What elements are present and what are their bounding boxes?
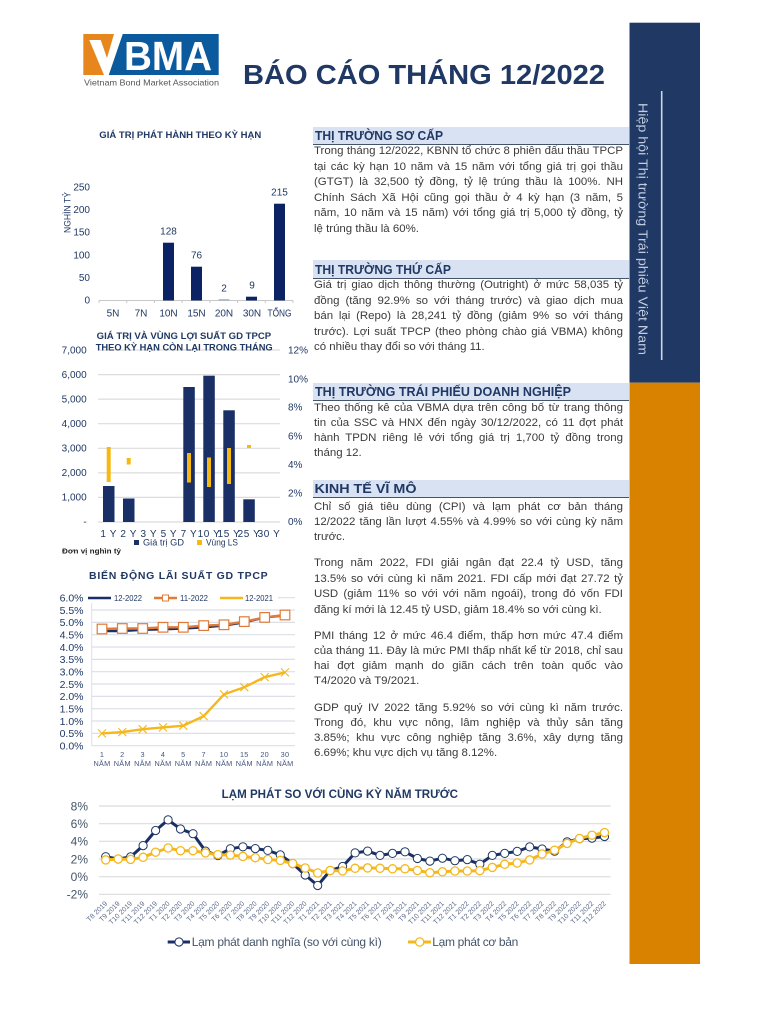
- line chart: lạm phát so với cùng kỳ năm trước: T1 2021: [298, 900, 321, 924]
- line chart: biến động lãi suất GD TPCP: NĂM: [236, 759, 253, 768]
- combo chart: giá trị và vùng lợi suất: Giá trị GD: [143, 538, 184, 548]
- line chart: lạm phát so với cùng kỳ năm trước: T6 2021: [360, 900, 383, 924]
- heading: [313, 127, 629, 144]
- line chart: biến động lãi suất GD TPCP: 10: [220, 750, 228, 759]
- text block: [314, 279, 623, 353]
- line chart: lạm phát so với cùng kỳ năm trước: Lạm phát cơ bản: [432, 935, 518, 949]
- bar chart: giá trị phát hành theo kỳ hạn: TỔNG: [268, 307, 292, 320]
- combo chart: giá trị và vùng lợi suất: 25 Y: [238, 529, 260, 540]
- logo: VBMA: [83, 33, 219, 88]
- text block: PMI: PMI tháng 12 ở mức 46.4 điểm, thấp hơn mức 47.4 điểm: [314, 630, 623, 642]
- line chart: biến động lãi suất GD TPCP: 3: [141, 750, 145, 759]
- line chart: biến động lãi suất GD TPCP: 7: [202, 750, 206, 759]
- combo chart: giá trị và vùng lợi suất: 10%: [288, 374, 308, 386]
- logo: VBMA: Vietnam Bond Market Association: [84, 78, 219, 88]
- text block: có nhiều thay đổi so với tháng 11.: [314, 341, 485, 353]
- text block: Giá trị giao dịch thông thường (Outright) ở mức 58,035 tỷ: [314, 279, 623, 291]
- bar chart: giá trị phát hành theo kỳ hạn: 7N: [135, 309, 147, 320]
- line chart: biến động lãi suất GD TPCP: 5.0%: [60, 617, 84, 629]
- text block: GDP: 6.69%; khu vực dịch vụ tăng 8.12%.: [314, 746, 497, 758]
- line chart: lạm phát so với cùng kỳ năm trước: T11 2021: [420, 900, 446, 926]
- line chart: lạm phát so với cùng kỳ năm trước: T12 2019: [133, 900, 159, 926]
- bar chart: giá trị phát hành theo kỳ hạn: 30N: [243, 309, 261, 320]
- line chart: biến động lãi suất GD TPCP: NĂM: [134, 759, 151, 768]
- sidebar: Hiệp hội Thị trường Trái phiếu Việt Nam: [636, 103, 650, 355]
- combo chart: giá trị và vùng lợi suất: 5,000: [62, 394, 87, 406]
- line chart: biến động lãi suất GD TPCP: 2.0%: [60, 691, 84, 703]
- line chart: biến động lãi suất GD TPCP: NĂM: [276, 759, 294, 768]
- line chart: lạm phát so với cùng kỳ năm trước: T12 2020: [283, 900, 309, 926]
- line chart: lạm phát so với cùng kỳ năm trước: Lạm phát danh nghĩa (so với cùng kì): [192, 935, 382, 949]
- combo chart: giá trị và vùng lợi suất: 6%: [288, 432, 303, 442]
- line chart: lạm phát so với cùng kỳ năm trước: T5 2020: [198, 900, 221, 924]
- line chart: biến động lãi suất GD TPCP: NĂM: [215, 759, 233, 768]
- combo chart: giá trị và vùng lợi suất: 10 Y: [198, 529, 220, 540]
- line chart: lạm phát so với cùng kỳ năm trước: T2 2021: [311, 900, 334, 924]
- combo chart: giá trị và vùng lợi suất: 30 Y: [258, 529, 280, 540]
- text block: bán lại (Repo) là 28,241 tỷ đồng (giảm 9% so với tháng: [314, 310, 623, 322]
- line chart: biến động lãi suất GD TPCP: 4.0%: [60, 642, 84, 654]
- heading: THỊ TRƯỜNG TRÁI PHIẾU DOANH NGHIỆP: [315, 384, 571, 399]
- line chart: biến động lãi suất GD TPCP: 1.5%: [60, 704, 84, 716]
- heading: THỊ TRƯỜNG SƠ CẤP: [315, 128, 443, 143]
- line chart: lạm phát so với cùng kỳ năm trước: T4 2022: [485, 900, 508, 924]
- text block: FDI: đăng kí mới là 12.45 tỷ USD, giảm 18.4% so với cùng kì.: [314, 604, 602, 616]
- line chart: lạm phát so với cùng kỳ năm trước: T9 2020: [248, 900, 271, 924]
- combo chart: giá trị và vùng lợi suất: 1 Y: [100, 529, 117, 540]
- line chart: biến động lãi suất GD TPCP: 5: [181, 750, 185, 759]
- line chart: lạm phát so với cùng kỳ năm trước: T12 2022: [582, 900, 608, 926]
- text block: CPI: 12/2022 tăng lần lượt 4.55% và 4.99% so với cùng kỳ năm: [314, 516, 623, 528]
- combo chart: giá trị và vùng lợi suất: [62, 330, 308, 556]
- bar chart: giá trị phát hành theo kỳ hạn: 0: [84, 296, 90, 306]
- line chart: lạm phát so với cùng kỳ năm trước: T10 2020: [258, 900, 284, 926]
- text block: GDP: [314, 702, 623, 758]
- bar chart: giá trị phát hành theo kỳ hạn: 76: [191, 250, 202, 262]
- heading: THỊ TRƯỜNG THỨ CẤP: [315, 262, 451, 277]
- bar chart: giá trị phát hành theo kỳ hạn: 150: [73, 228, 90, 238]
- bar chart: giá trị phát hành theo kỳ hạn: 9: [249, 280, 255, 292]
- line chart: lạm phát so với cùng kỳ năm trước: T6 2020: [211, 900, 234, 924]
- combo chart: giá trị và vùng lợi suất: Vùng LS: [206, 538, 238, 548]
- line chart: lạm phát so với cùng kỳ năm trước: T10 2021: [407, 900, 433, 926]
- title: BÁO CÁO THÁNG 12/2022: [243, 59, 605, 90]
- text block: lệ trúng thầu là 60%.: [314, 222, 419, 234]
- combo chart: giá trị và vùng lợi suất: 5 Y: [161, 529, 177, 540]
- line chart: lạm phát so với cùng kỳ năm trước: T6 2022: [510, 900, 533, 924]
- bar chart: giá trị phát hành theo kỳ hạn: 2: [221, 284, 227, 294]
- combo chart: giá trị và vùng lợi suất: GIÁ TRỊ VÀ VÙNG LỢI SUẤT GD TPCP: [97, 330, 272, 342]
- combo chart: giá trị và vùng lợi suất: 2%: [288, 488, 303, 500]
- text block: hành TPDN riêng lẻ với tổng giá trị 1,700 tỷ đồng trong: [314, 432, 623, 444]
- combo chart: giá trị và vùng lợi suất: 2,000: [62, 468, 87, 479]
- heading: KINH TẾ VĨ MÔ: [314, 481, 416, 496]
- line chart: lạm phát so với cùng kỳ năm trước: T7 2022: [522, 900, 546, 924]
- line chart: biến động lãi suất GD TPCP: 2: [120, 750, 124, 759]
- line chart: biến động lãi suất GD TPCP: 3.0%: [60, 666, 84, 678]
- bar chart: giá trị phát hành theo kỳ hạn: 100: [73, 250, 90, 262]
- combo chart: giá trị và vùng lợi suất: Đơn vị nghìn tỷ: [62, 546, 122, 556]
- logo: VBMA: BMA: [124, 33, 212, 79]
- combo chart: giá trị và vùng lợi suất: 3,000: [62, 444, 87, 454]
- bar chart: giá trị phát hành theo kỳ hạn: 10N: [159, 309, 178, 320]
- text block: GDP: Trong đó, khu vực nông, lâm nghiệp và thủy sản tăng: [314, 716, 623, 728]
- line chart: biến động lãi suất GD TPCP: BIẾN ĐỘNG LÃI SUẤT GD TPCP: [89, 569, 268, 582]
- line chart: biến động lãi suất GD TPCP: 1: [100, 750, 104, 759]
- line chart: lạm phát so với cùng kỳ năm trước: T2 2020: [161, 900, 184, 924]
- text block: PMI: hai đợt giảm mạnh do giãn cách trên toàn quốc vào: [314, 660, 623, 672]
- line chart: biến động lãi suất GD TPCP: 0.5%: [60, 728, 84, 740]
- combo chart: giá trị và vùng lợi suất: 1,000: [62, 492, 87, 504]
- line chart: biến động lãi suất GD TPCP: 12-2022: [114, 593, 142, 603]
- combo chart: giá trị và vùng lợi suất: 2 Y: [120, 529, 137, 540]
- line chart: biến động lãi suất GD TPCP: 0.0%: [60, 740, 84, 752]
- line chart: lạm phát so với cùng kỳ năm trước: [67, 787, 611, 949]
- bar chart: giá trị phát hành theo kỳ hạn: NGHÌN TỶ: [62, 191, 74, 233]
- combo chart: giá trị và vùng lợi suất: 7,000: [62, 346, 87, 356]
- line chart: lạm phát so với cùng kỳ năm trước: T4 2021: [335, 900, 359, 924]
- text block: Theo thống kê của VBMA dựa trên công bố từ trang thông: [314, 402, 623, 414]
- line chart: lạm phát so với cùng kỳ năm trước: T2 2022: [460, 900, 483, 924]
- line chart: lạm phát so với cùng kỳ năm trước: -2%: [67, 888, 88, 902]
- line chart: biến động lãi suất GD TPCP: 5.5%: [60, 605, 84, 617]
- combo chart: giá trị và vùng lợi suất: 0%: [288, 517, 303, 528]
- text block: [314, 145, 623, 234]
- combo chart: giá trị và vùng lợi suất: -: [83, 517, 87, 528]
- bar chart: giá trị phát hành theo kỳ hạn: 15N: [187, 309, 206, 320]
- combo chart: giá trị và vùng lợi suất: 7 Y: [181, 529, 197, 540]
- text block: Trong tháng 12/2022, KBNN tổ chức 8 phiên đấu thầu TPCP: [314, 145, 623, 157]
- line chart: lạm phát so với cùng kỳ năm trước: T11 2022: [570, 900, 595, 926]
- text block: tại các kỳ hạn 10 năm và 15 năm với tổng giá trị gọi thầu: [314, 160, 623, 172]
- line chart: biến động lãi suất GD TPCP: NĂM: [93, 759, 111, 768]
- text block: trước). Lợi suất TPCP (theo phòng chào giá VBMA) không: [314, 326, 623, 338]
- panel: thị trường trái phiếu doanh nghiệp: [313, 383, 629, 458]
- line chart: lạm phát so với cùng kỳ năm trước: 0%: [71, 870, 88, 884]
- line chart: biến động lãi suất GD TPCP: 6.0%: [60, 592, 84, 604]
- line chart: lạm phát so với cùng kỳ năm trước: T3 2020: [173, 900, 196, 924]
- text block: GDP: 3.85%; khu vực công nghiệp tăng 3.6%, xây dựng tăng: [314, 732, 623, 744]
- text block: FDI: USD (giảm 11% so với với năm ngoái), trong đó vốn FDI: [314, 588, 623, 600]
- line chart: lạm phát so với cùng kỳ năm trước: T10 2022: [557, 900, 583, 926]
- line chart: lạm phát so với cùng kỳ năm trước: T8 2022: [535, 900, 558, 924]
- line chart: biến động lãi suất GD TPCP: 20: [260, 750, 269, 759]
- line chart: lạm phát so với cùng kỳ năm trước: T8 2020: [236, 900, 259, 924]
- text block: GDP: GDP quý IV 2022 tăng 5.92% so với cùng kì năm trước.: [314, 702, 623, 714]
- line chart: lạm phát so với cùng kỳ năm trước: T1 2022: [448, 900, 471, 924]
- text block: năm, 10 năm và 15 năm) với tổng giá trị 5,000 tỷ đồng, tỷ: [314, 207, 623, 219]
- heading: [313, 480, 629, 498]
- line chart: biến động lãi suất GD TPCP: 12-2021: [245, 593, 273, 603]
- line chart: biến động lãi suất GD TPCP: NĂM: [195, 759, 212, 768]
- combo chart: giá trị và vùng lợi suất: 4,000: [62, 419, 87, 430]
- line chart: biến động lãi suất GD TPCP: NĂM: [256, 759, 273, 768]
- line chart: lạm phát so với cùng kỳ năm trước: T12 2021: [432, 900, 458, 926]
- line chart: lạm phát so với cùng kỳ năm trước: T8 2019: [86, 900, 109, 924]
- text block: tháng 12.: [314, 446, 362, 458]
- line chart: lạm phát so với cùng kỳ năm trước: 6%: [71, 817, 88, 831]
- line chart: biến động lãi suất GD TPCP: 4: [161, 750, 165, 759]
- line chart: lạm phát so với cùng kỳ năm trước: T5 2022: [498, 900, 521, 924]
- line chart: biến động lãi suất GD TPCP: 2.5%: [60, 679, 84, 691]
- line chart: biến động lãi suất GD TPCP: 3.5%: [60, 654, 84, 666]
- line chart: lạm phát so với cùng kỳ năm trước: T9 2021: [398, 900, 421, 924]
- line chart: lạm phát so với cùng kỳ năm trước: T9 2019: [99, 900, 122, 924]
- text block: đồng (tăng 92.9% so với tháng trước) và giao dịch mua: [314, 294, 623, 306]
- line chart: biến động lãi suất GD TPCP: 1.0%: [60, 716, 84, 728]
- line chart: biến động lãi suất GD TPCP: NĂM: [154, 759, 172, 768]
- bar chart: giá trị phát hành theo kỳ hạn: 250: [73, 182, 90, 194]
- line chart: lạm phát so với cùng kỳ năm trước: T7 2020: [223, 900, 246, 924]
- line chart: lạm phát so với cùng kỳ năm trước: T9 2022: [547, 900, 571, 924]
- line chart: lạm phát so với cùng kỳ năm trước: 8%: [71, 799, 88, 813]
- text block: FDI: 13.5% so với cùng kì năm 2021. FDI cấp mới đạt 27.72 tỷ: [314, 572, 623, 584]
- combo chart: giá trị và vùng lợi suất: 4%: [288, 460, 303, 471]
- line chart: biến động lãi suất GD TPCP: [60, 569, 295, 768]
- text block: CPI: trước.: [314, 530, 345, 542]
- text block: PMI: [314, 630, 623, 686]
- combo chart: giá trị và vùng lợi suất: 6,000: [62, 370, 87, 381]
- text block: Chính Sách Xã Hội cũng gọi thầu ở 4 kỳ hạn (3 năm, 5: [314, 192, 623, 204]
- bar chart: giá trị phát hành theo kỳ hạn: 20N: [215, 309, 233, 320]
- line chart: lạm phát so với cùng kỳ năm trước: T3 2021: [323, 900, 346, 924]
- heading: [313, 260, 629, 279]
- bar chart: giá trị phát hành theo kỳ hạn: 50: [79, 273, 90, 284]
- text block: CPI: [314, 500, 623, 542]
- bar chart: giá trị phát hành theo kỳ hạn: 215: [271, 188, 288, 198]
- bar chart: giá trị phát hành theo kỳ hạn: 200: [73, 205, 90, 216]
- text block: PMI: của tháng 11. Đây là mức PMI thấp nhất kể từ 2018, chỉ sau: [314, 644, 623, 656]
- bar chart: giá trị phát hành theo kỳ hạn: 128: [160, 226, 177, 238]
- line chart: lạm phát so với cùng kỳ năm trước: 4%: [71, 835, 88, 849]
- text block: [314, 402, 623, 458]
- combo chart: giá trị và vùng lợi suất: 12%: [288, 346, 308, 356]
- bar chart: giá trị phát hành theo kỳ hạn: GIÁ TRỊ PHÁT HÀNH THEO KỲ HẠN: [99, 129, 261, 141]
- line chart: lạm phát so với cùng kỳ năm trước: T7 2021: [373, 900, 396, 924]
- panel: thị trường thứ cấp: [313, 260, 629, 353]
- line chart: biến động lãi suất GD TPCP: 30: [281, 750, 289, 759]
- text block: FDI: Trong năm 2022, FDI giải ngân đạt 22.4 tỷ USD, tăng: [314, 557, 623, 569]
- bar chart: giá trị phát hành theo kỳ hạn: [62, 129, 294, 320]
- line chart: lạm phát so với cùng kỳ năm trước: T1 2020: [148, 900, 172, 924]
- sidebar: [630, 22, 700, 964]
- line chart: biến động lãi suất GD TPCP: 15: [240, 750, 249, 759]
- line chart: biến động lãi suất GD TPCP: 11-2022: [180, 593, 208, 603]
- line chart: biến động lãi suất GD TPCP: 4.5%: [60, 630, 84, 642]
- line chart: biến động lãi suất GD TPCP: NĂM: [175, 759, 192, 768]
- line chart: lạm phát so với cùng kỳ năm trước: T11 2019: [121, 900, 147, 926]
- panel: kinh tế vĩ mô: [313, 480, 629, 758]
- combo chart: giá trị và vùng lợi suất: THEO KỲ HẠN CÒN LẠI TRONG THÁNG: [96, 342, 273, 354]
- bar chart: giá trị phát hành theo kỳ hạn: 5N: [107, 309, 119, 320]
- line chart: lạm phát so với cùng kỳ năm trước: T10 2019: [108, 900, 134, 926]
- combo chart: giá trị và vùng lợi suất: 8%: [288, 402, 303, 414]
- line chart: lạm phát so với cùng kỳ năm trước: LẠM PHÁT SO VỚI CÙNG KỲ NĂM TRƯỚC: [222, 788, 458, 801]
- text block: PMI: T4/2020 và T9/2021.: [314, 674, 419, 686]
- text block: FDI: [314, 557, 623, 616]
- line chart: biến động lãi suất GD TPCP: NĂM: [114, 759, 131, 768]
- line chart: lạm phát so với cùng kỳ năm trước: T5 2021: [348, 900, 371, 924]
- combo chart: giá trị và vùng lợi suất: 3 Y: [140, 529, 157, 540]
- combo chart: giá trị và vùng lợi suất: 15 Y: [218, 529, 240, 540]
- line chart: lạm phát so với cùng kỳ năm trước: T3 2022: [473, 900, 496, 924]
- line chart: lạm phát so với cùng kỳ năm trước: 2%: [71, 852, 88, 866]
- text block: tin của SSC và HNX đến ngày 30/12/2022, có 11 đợt phát: [314, 416, 623, 428]
- text block: CPI: Chỉ số giá tiêu dùng (CPI) và lạm phát cơ bản tháng: [314, 500, 623, 512]
- line chart: lạm phát so với cùng kỳ năm trước: T8 2021: [385, 900, 408, 924]
- text block: (GTGT) là 32,500 tỷ đồng, tỷ lệ trúng thầu là 100%. NH: [314, 176, 623, 188]
- panel: thị trường sơ cấp: [313, 127, 629, 234]
- line chart: lạm phát so với cùng kỳ năm trước: T4 2020: [186, 900, 209, 924]
- line chart: lạm phát so với cùng kỳ năm trước: T11 2020: [271, 900, 296, 926]
